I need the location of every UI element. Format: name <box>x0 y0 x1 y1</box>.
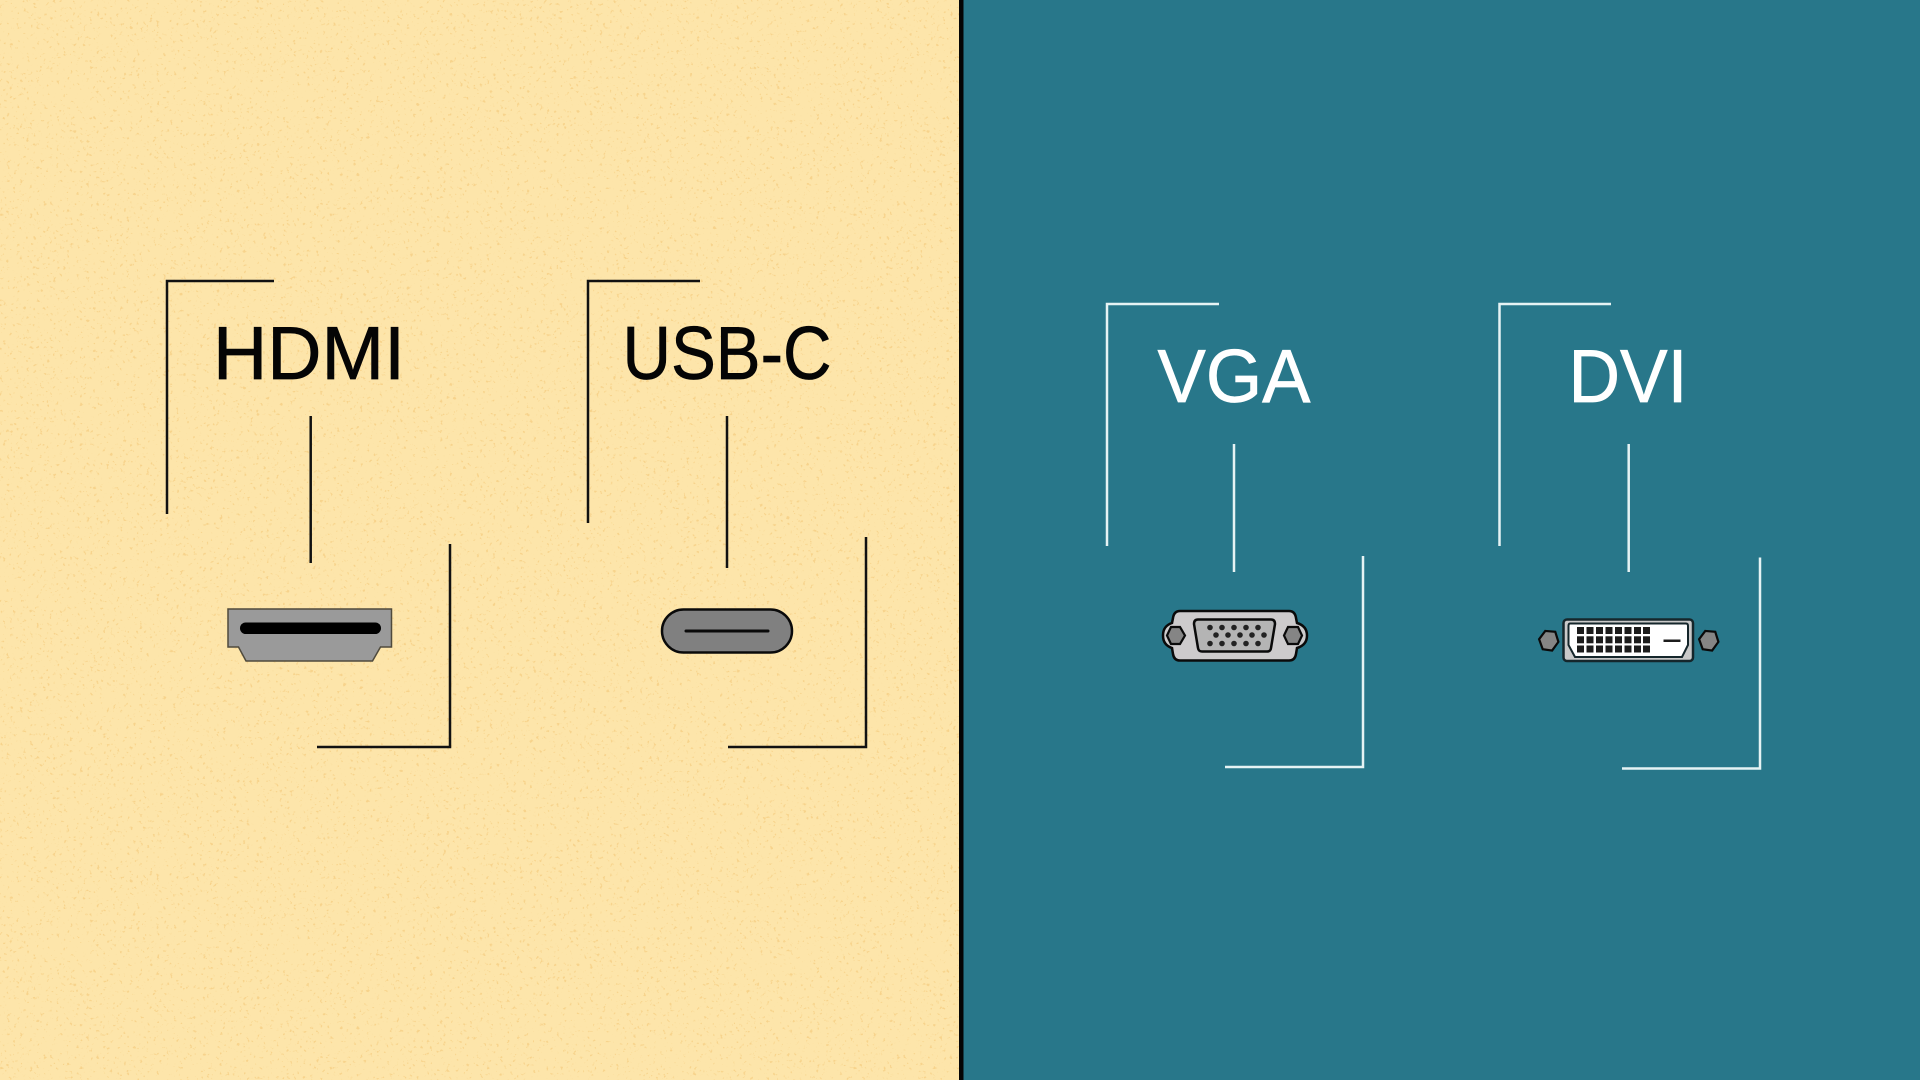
icon: HDMI connector <box>228 609 392 661</box>
VGA heading: VGA <box>1158 334 1310 418</box>
DVI connecting line <box>1627 444 1630 572</box>
card: DVI <box>1500 304 1760 768</box>
card: HDMI <box>167 281 450 747</box>
icon: DVI connector <box>1538 620 1720 661</box>
HDMI heading: HDMI <box>213 311 405 395</box>
USB-C heading: USB-C <box>622 311 832 395</box>
card: VGA <box>1107 304 1363 767</box>
VGA connecting line <box>1233 444 1235 572</box>
VGA bottom-right bracket <box>1225 556 1363 767</box>
icon: VGA connector <box>1163 611 1307 660</box>
USB-C bottom-right bracket <box>728 537 866 747</box>
card: USB-C <box>588 281 866 747</box>
USB-C top-left bracket <box>588 281 700 523</box>
DVI top-left bracket <box>1500 304 1611 546</box>
USB-C connecting line <box>726 416 728 568</box>
DVI heading: DVI <box>1568 334 1688 418</box>
HDMI bottom-right bracket <box>317 544 450 747</box>
VGA top-left bracket <box>1107 304 1219 546</box>
panel: right background <box>963 0 1920 1080</box>
icon: USB-C connector <box>662 610 792 652</box>
panel: left background <box>0 0 960 1080</box>
HDMI top-left bracket <box>167 281 274 514</box>
DVI bottom-right bracket <box>1622 558 1760 768</box>
HDMI connecting line <box>309 416 312 563</box>
center divider <box>959 0 964 1080</box>
